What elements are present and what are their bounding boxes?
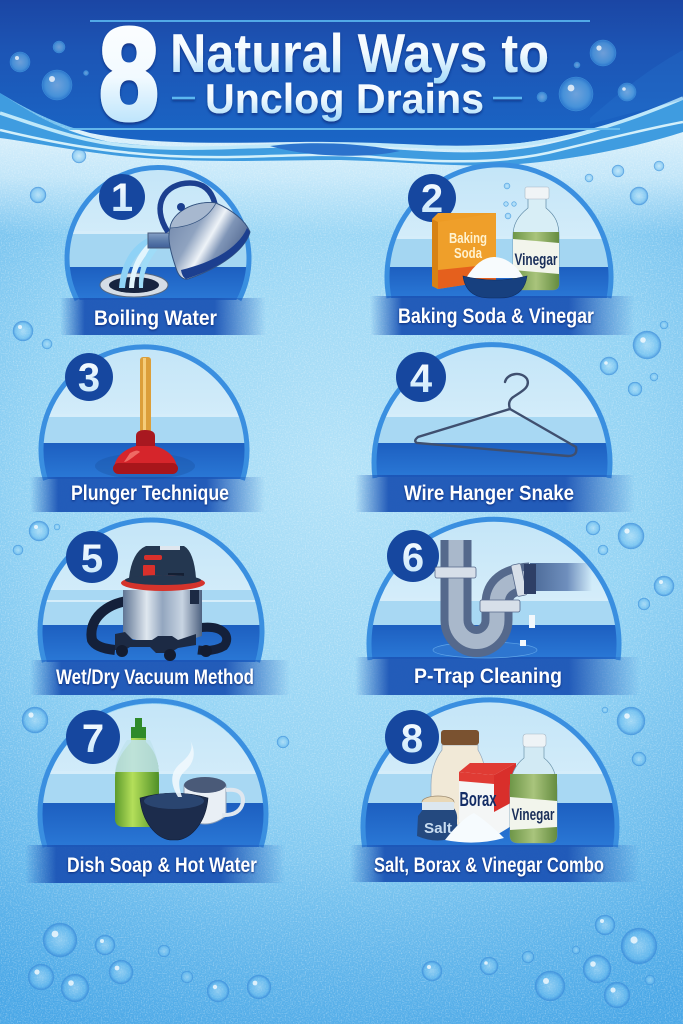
number badge [66, 531, 118, 583]
icon: jar, borax box, vinegar and salt: Vinegar [512, 805, 555, 824]
label banner [25, 845, 285, 883]
label: Boiling Water [94, 307, 217, 330]
icon: kettle pouring into drain [100, 183, 250, 297]
label: Baking Soda & Vinegar [398, 305, 594, 328]
scene [40, 700, 270, 847]
label banner [355, 475, 635, 512]
label: Wet/Dry Vacuum Method [56, 666, 254, 689]
label banner [30, 660, 290, 695]
label banner [350, 845, 640, 882]
number badge: 5 [81, 537, 103, 581]
label: Salt, Borax & Vinegar Combo [374, 854, 604, 877]
title [96, 5, 549, 149]
label banner [30, 477, 265, 512]
header water banner [0, 0, 683, 165]
panel 3: plunger technique [30, 345, 265, 512]
icon: p-trap pipe [433, 540, 592, 658]
number badge: 7 [82, 717, 104, 761]
number badge: 2 [421, 177, 443, 221]
icon: baking soda box, bowl and vinegar bottle: Vinegar [514, 250, 558, 269]
icon: baking soda box, bowl and vinegar bottle: Soda [454, 245, 482, 262]
panel 7: dish soap and hot water [25, 700, 285, 883]
title line two: Unclog Drains [205, 75, 484, 122]
scene [40, 345, 250, 479]
label banner [370, 296, 635, 335]
scene [370, 345, 615, 477]
icon: jar, borax box, vinegar and salt: Salt [424, 820, 452, 837]
label: Wire Hanger Snake [404, 482, 574, 505]
panel 2: baking soda and vinegar [370, 165, 635, 335]
title dashes [172, 97, 522, 99]
label banner [355, 657, 640, 695]
panel 1: boiling water [60, 165, 266, 335]
scene [38, 518, 264, 662]
panel 8: salt, borax and vinegar combo [350, 698, 640, 882]
number badge [65, 353, 113, 401]
title numeral 8: 8 [96, 5, 162, 149]
number badge [387, 530, 439, 582]
number badge [66, 710, 120, 764]
scene [70, 170, 246, 300]
panel 4: wire hanger snake [355, 345, 635, 512]
icon: plunger [95, 357, 195, 479]
icon: baking soda box, bowl and vinegar bottle [432, 183, 559, 298]
icon: wet/dry vacuum [91, 546, 227, 661]
label: Dish Soap & Hot Water [67, 854, 257, 877]
number badge [385, 710, 439, 764]
label banner [60, 298, 266, 335]
scene [360, 698, 620, 847]
icon: jar, borax box, vinegar and salt [417, 730, 557, 843]
scene [365, 515, 620, 659]
number badge: 1 [111, 176, 133, 220]
number badge: 6 [402, 536, 424, 580]
panel 5: wet/dry vacuum [30, 518, 290, 695]
number badge: 4 [410, 357, 433, 401]
icon: baking soda box, bowl and vinegar bottle: Baking [449, 230, 487, 247]
icon: jar, borax box, vinegar and salt: Borax [460, 789, 496, 811]
icon: dish soap, bowl and mug [115, 718, 243, 840]
number badge [408, 174, 456, 222]
number badge [99, 174, 145, 220]
label: Plunger Technique [71, 482, 229, 505]
number badge: 3 [78, 356, 100, 400]
scene [385, 165, 615, 298]
panel 6: p-trap cleaning [355, 515, 640, 695]
label: P-Trap Cleaning [414, 665, 562, 688]
number badge: 8 [401, 717, 423, 761]
number badge [396, 352, 446, 402]
title line one: Natural Ways to [170, 22, 549, 84]
icon: wire hanger [415, 374, 576, 456]
